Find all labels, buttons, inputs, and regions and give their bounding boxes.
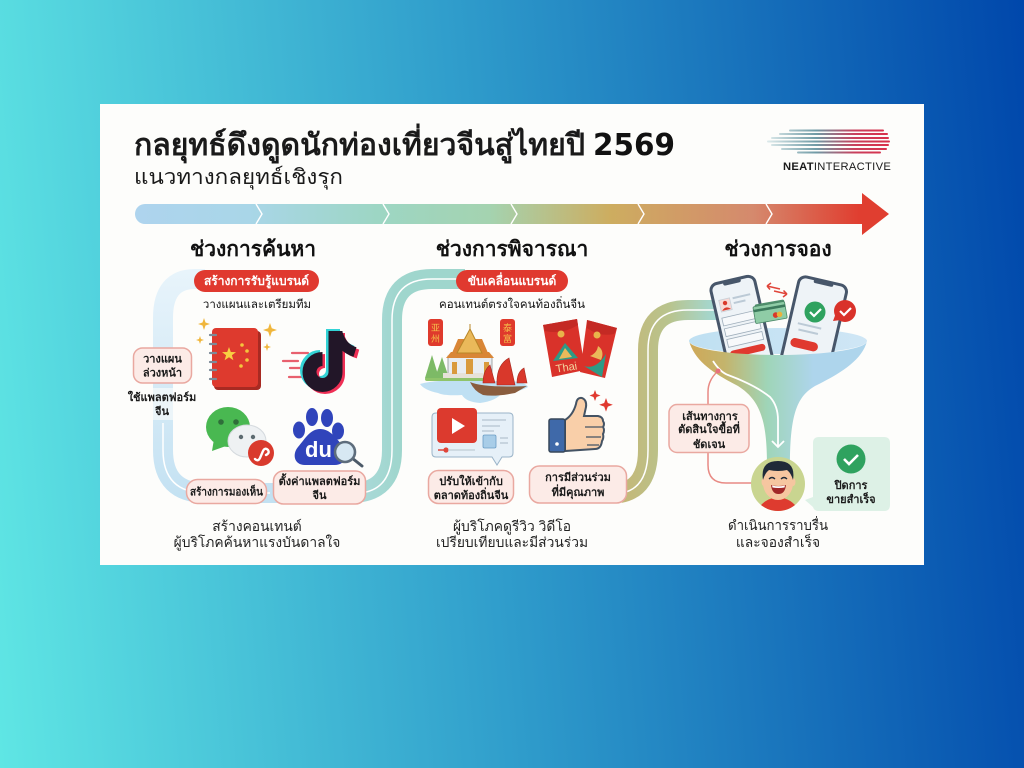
caption: search phase outcome: ผู้บริโภคค้นหาแรงบันดาลใจ bbox=[174, 534, 340, 551]
label: plan ahead bbox=[134, 348, 192, 383]
icon: Thai temple and junk boat: 泰 bbox=[503, 322, 512, 333]
icon: thumbs up bbox=[549, 390, 613, 452]
caption: booking phase outcome bbox=[728, 516, 829, 550]
label: set up Chinese platforms: ตั้งค่าแพลตฟอร์ม bbox=[279, 473, 360, 488]
icon: WeChat bbox=[206, 407, 274, 466]
heading: search phase: ช่วงการค้นหา bbox=[190, 237, 316, 261]
label: set up Chinese platforms bbox=[274, 471, 366, 504]
icon: credit card and exchange arrows bbox=[753, 283, 787, 324]
label: plan ahead: ล่วงหน้า bbox=[143, 366, 182, 380]
panel: deal closed: ปิดการ bbox=[833, 479, 868, 492]
label: adapt to local market bbox=[428, 470, 514, 504]
panel: deal closed bbox=[805, 437, 890, 511]
icon: China notebook bbox=[196, 318, 277, 390]
caption: plan and prepare team: วางแผนและเตรียมทีม bbox=[203, 298, 311, 311]
title: 2569 bbox=[593, 128, 675, 163]
label: quality engagement bbox=[530, 466, 626, 503]
caption: consideration phase outcome: ผู้บริโภคดูรีวิว วิดีโอ bbox=[453, 518, 571, 535]
label: use Chinese platforms: จีน bbox=[154, 405, 169, 418]
label: quality engagement: การมีส่วนร่วม bbox=[545, 471, 611, 484]
funnel body bbox=[689, 341, 867, 465]
icon: happy traveller bbox=[751, 457, 805, 514]
journey ribbon: booking band bbox=[620, 310, 720, 493]
title bbox=[134, 123, 675, 164]
logo: Neat Interactive bbox=[768, 130, 891, 173]
label: clear purchase decision path bbox=[669, 404, 749, 452]
title: กลยุทธ์ดึงดูดนักท่องเที่ยวจีนสู่ไทยปี bbox=[134, 123, 585, 164]
label: build visibility bbox=[186, 480, 266, 504]
label: adapt to local market: ตลาดท้องถิ่นจีน bbox=[434, 487, 509, 502]
icon: red envelopes bbox=[543, 319, 617, 378]
icon: Thai temple and junk boat bbox=[420, 319, 528, 403]
label: build visibility: สร้างการมองเห็น bbox=[190, 484, 263, 498]
journey ribbon: search band bbox=[163, 279, 280, 493]
icon: green check bbox=[836, 444, 866, 474]
icon: Baidu bbox=[293, 408, 362, 466]
label: use Chinese platforms: ใช้แพลตฟอร์ม bbox=[128, 390, 196, 404]
icon: booking phone right bbox=[780, 275, 856, 355]
label: set up Chinese platforms: จีน bbox=[312, 489, 327, 502]
caption: booking phase outcome: ดำเนินการราบรื่น bbox=[728, 516, 829, 533]
icon: Thai temple and junk boat: 亚 bbox=[431, 323, 440, 333]
pill: drive brand: ขับเคลื่อนแบรนด์ bbox=[468, 272, 556, 288]
connector: decision path line bbox=[708, 368, 752, 483]
pill: brand awareness: สร้างการรับรู้แบรนด์ bbox=[204, 274, 309, 289]
icon: booking funnel bbox=[689, 275, 867, 465]
label: clear purchase decision path: ตัดสินใจขื้อที่ bbox=[678, 421, 740, 436]
caption: booking phase outcome: และจองสำเร็จ bbox=[736, 533, 820, 550]
panel: deal closed: ขายสำเร็จ bbox=[826, 492, 876, 506]
subtitle: แนวทางกลยุทธ์เชิงรุก bbox=[134, 165, 343, 190]
logo: Neat Interactive: NEATINTERACTIVE bbox=[783, 161, 891, 173]
label: adapt to local market: ปรับให้เข้ากับ bbox=[439, 474, 503, 488]
timeline arrow bbox=[135, 193, 889, 235]
caption: search phase outcome: สร้างคอนเทนต์ bbox=[212, 518, 302, 534]
arrow: decision path through funnel bbox=[713, 361, 784, 447]
label: plan ahead: วางแผน bbox=[143, 354, 182, 366]
pill: drive brand bbox=[456, 270, 568, 292]
caption: search phase outcome bbox=[174, 518, 340, 551]
heading: booking phase: ช่วงการจอง bbox=[724, 238, 832, 261]
icon: Thai temple and junk boat: 富 bbox=[503, 333, 512, 344]
caption: consideration phase outcome: เปรียบเทียบและมีส่วนร่วม bbox=[436, 535, 588, 550]
caption: consideration phase outcome bbox=[436, 518, 588, 550]
pill: brand awareness bbox=[194, 270, 319, 292]
heading: consideration phase: ช่วงการพิจารณา bbox=[436, 238, 588, 261]
icon: Thai temple and junk boat: 州 bbox=[431, 334, 440, 344]
icon: TikTok bbox=[283, 329, 358, 387]
icon: red envelopes: Thai bbox=[555, 360, 578, 376]
icon: Baidu: du bbox=[305, 437, 332, 462]
label: use Chinese platforms bbox=[128, 388, 200, 420]
icon: booking phone left bbox=[709, 274, 774, 355]
journey ribbon: consideration band bbox=[270, 279, 465, 493]
caption: content for locals: คอนเทนต์ตรงใจคนท้องถิ่นจีน bbox=[439, 296, 585, 311]
label: clear purchase decision path: เส้นทางการ bbox=[682, 410, 738, 423]
label: clear purchase decision path: ชัดเจน bbox=[693, 438, 726, 451]
icon: video content card bbox=[432, 408, 513, 465]
label: quality engagement: ที่มีคุณภาพ bbox=[552, 484, 604, 500]
panel: white infographic card bbox=[100, 104, 924, 565]
